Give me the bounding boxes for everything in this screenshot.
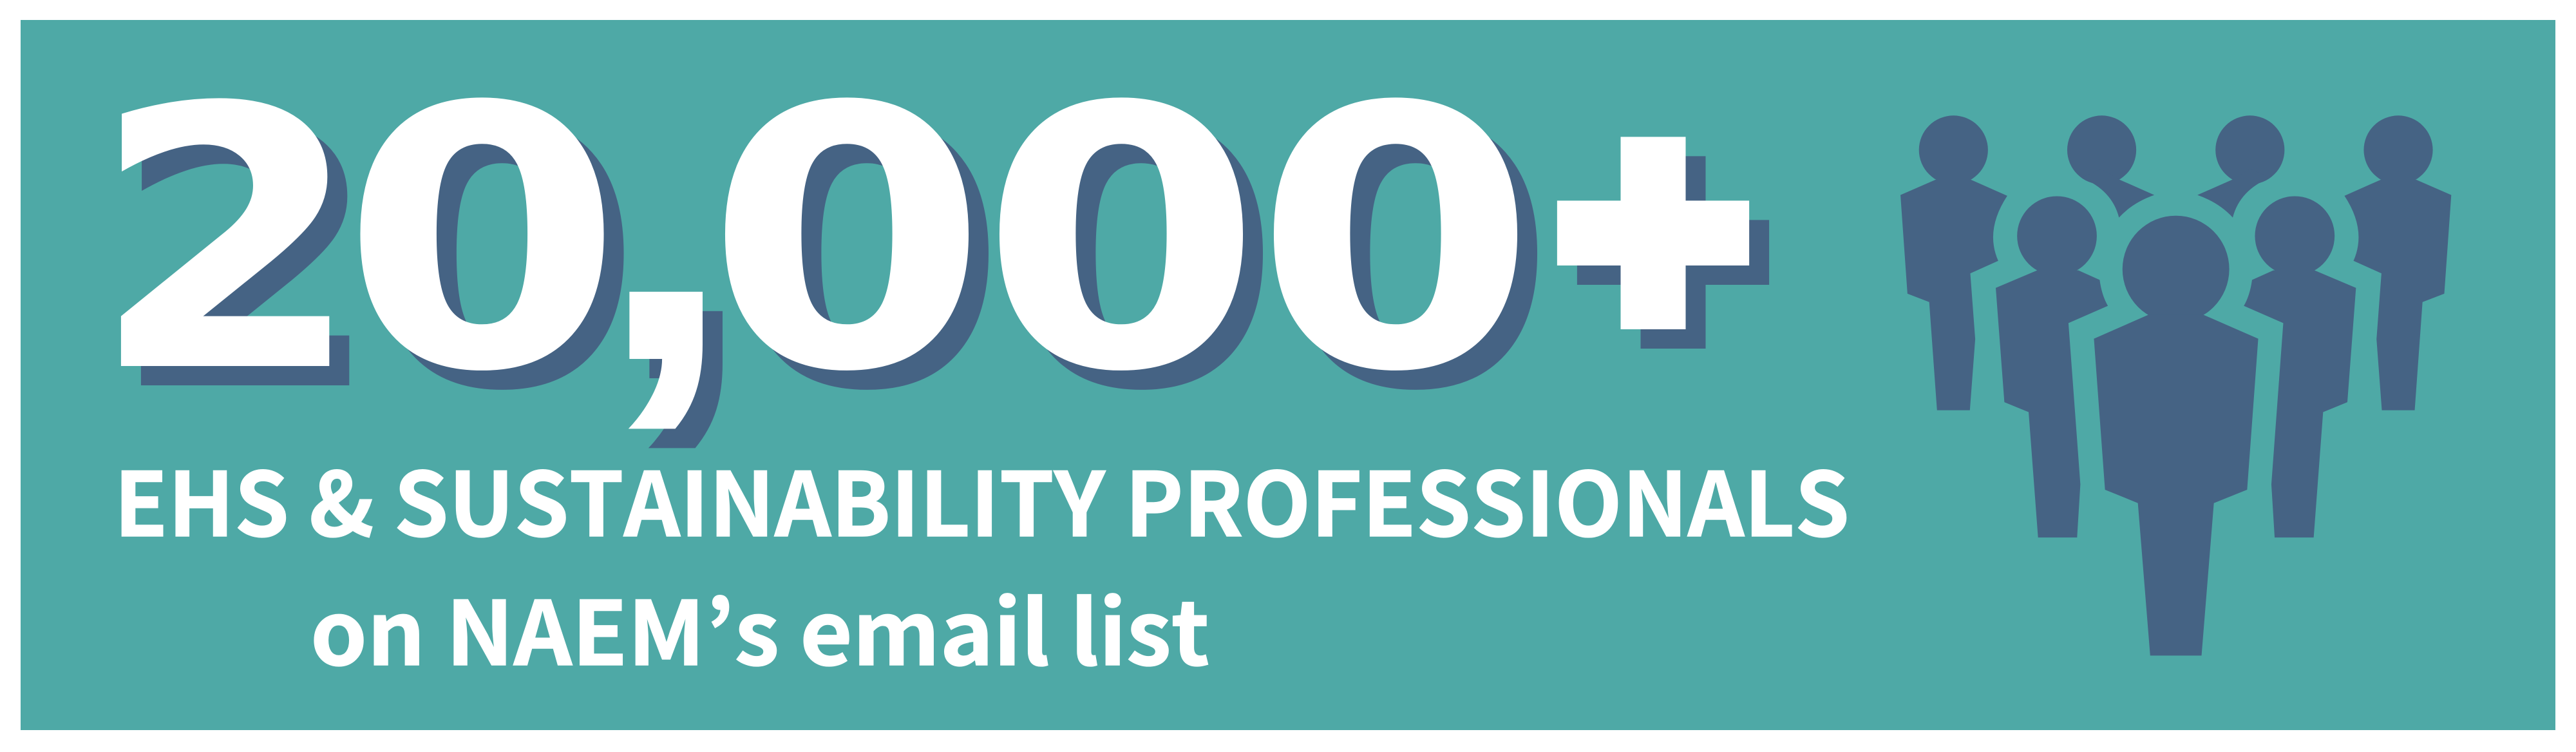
big number shadow: 2: [110, 51, 383, 471]
subtitle line 2: on NAEM’s email list: [310, 563, 1209, 691]
icon: back far-left person: [1900, 115, 2007, 410]
big number shadow: [110, 0, 1777, 474]
big number shadow: 0: [726, 50, 1008, 470]
big number: 20,000+: +: [1549, 81, 1757, 371]
big number shadow: 0: [361, 50, 643, 470]
big number: 20,000+: 0: [980, 30, 1262, 450]
big number shadow: +: [1569, 100, 1777, 390]
big number: 20,000+: 0: [706, 30, 988, 450]
big number: 20,000+: 2: [90, 32, 363, 452]
big number shadow: 0: [1000, 50, 1282, 470]
big number: 20,000+: 0: [1255, 30, 1537, 450]
icon: middle-right person: [2244, 196, 2356, 537]
icon: back far-right person: [2344, 115, 2451, 410]
big number: 20,000+: 0: [341, 30, 623, 450]
big number shadow: 0: [1274, 50, 1557, 470]
big number: 20,000+: [90, 0, 1757, 454]
icon: group of people: [1900, 115, 2451, 655]
subtitle line 1: EHS & SUSTAINABILITY PROFESSIONALS: [114, 434, 1850, 562]
icon: back inner-right person: [2197, 115, 2284, 218]
icon: front center person: [2094, 216, 2259, 655]
icon: back inner-left person: [2067, 115, 2154, 218]
icon: middle-left person: [1996, 196, 2108, 537]
